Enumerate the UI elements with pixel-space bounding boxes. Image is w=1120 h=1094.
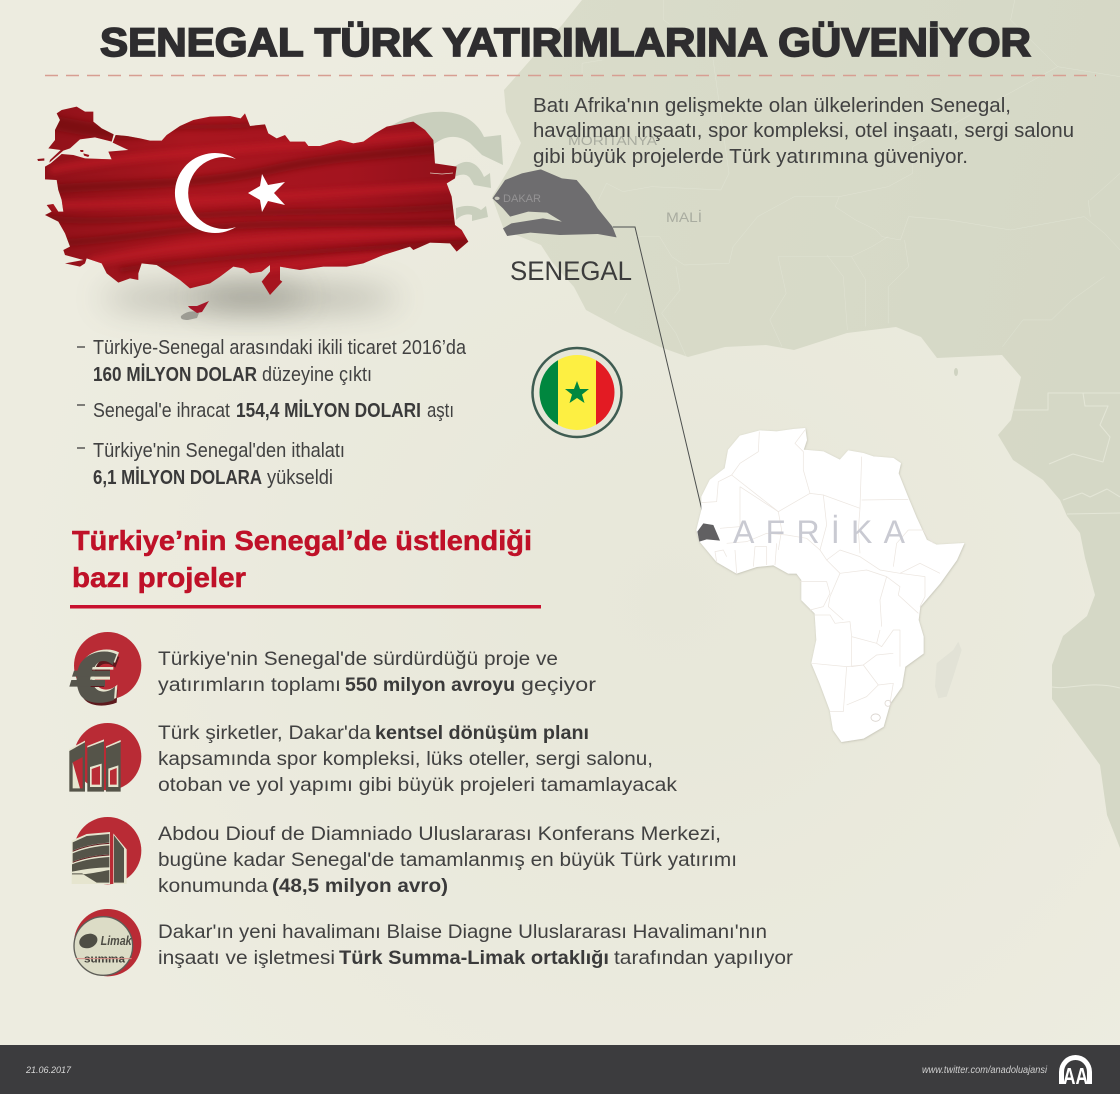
label: Senegal: SENEGAL xyxy=(510,256,632,286)
project text 1: Türkiye'nin Senegal'de sürdürdüğü proje ve xyxy=(158,649,558,670)
bullet 1: Türkiye-Senegal arasındaki ikili ticaret 2016’da xyxy=(93,337,467,359)
icon: Limak Summa logo: Limak xyxy=(101,934,132,948)
project text 2: kentsel dönüşüm planı xyxy=(375,723,589,744)
project text 1: 550 milyon avroyu xyxy=(345,675,515,696)
footer date: 21.06.2017 xyxy=(25,1065,72,1076)
icon: euro xyxy=(69,632,141,706)
bullet 1 xyxy=(77,337,467,386)
label: Mali: MALİ xyxy=(666,208,702,225)
Senegal on Africa map xyxy=(697,523,720,542)
bullet 3: Türkiye'nin Senegal'den ithalatı xyxy=(93,440,345,462)
project text 2 xyxy=(158,723,678,796)
title: SENEGAL TÜRK YATIRIMLARINA GÜVENİYOR xyxy=(100,20,1031,65)
icon: crescent xyxy=(175,153,236,233)
intro text: Batı Afrika'nın gelişmekte olan ülkelerinden Senegal, xyxy=(533,95,1011,117)
projects heading: bazı projeler xyxy=(72,562,246,593)
project text 3: Abdou Diouf de Diamniado Uluslararası Konferans Merkezi, xyxy=(158,824,721,845)
project text 2: Türk şirketler, Dakar'da xyxy=(158,723,371,744)
west africa background map xyxy=(492,0,1120,848)
Madagascar xyxy=(935,642,962,698)
footer bar xyxy=(0,1045,1120,1094)
bullet 2: Senegal'e ihracat xyxy=(93,400,230,422)
project text 3: (48,5 milyon avro) xyxy=(272,876,448,897)
label: Dakar: DAKAR xyxy=(503,193,541,205)
arrows from Turkey to Senegal xyxy=(389,112,503,221)
trade stats bullets xyxy=(77,337,467,489)
footer url: www.twitter.com/anadoluajansi xyxy=(922,1065,1048,1076)
bullet 3 xyxy=(77,440,345,489)
project text 3: konumunda xyxy=(158,876,268,897)
intro text: havalimanı inşaatı, spor kompleksi, otel inşaatı, sergi salonu xyxy=(533,120,1074,142)
Cyprus xyxy=(181,301,209,320)
icon: buildings xyxy=(69,723,141,792)
icon: AA logo: AA xyxy=(1063,1063,1088,1089)
project text 4: tarafından yapılıyor xyxy=(614,948,794,969)
project text 1: geçiyor xyxy=(521,675,597,696)
Senegal on map xyxy=(492,169,617,237)
project text 1: yatırımların toplamı xyxy=(158,675,341,696)
project text 2: kapsamında spor kompleksi, lüks oteller, sergi salonu, xyxy=(158,749,653,770)
bullet 2: 154,4 MİLYON DOLARI xyxy=(236,399,421,422)
Senegal flag xyxy=(532,348,622,437)
projects heading: Türkiye’nin Senegal’de üstlendiği xyxy=(72,525,532,556)
icon: star xyxy=(248,174,285,212)
label: Afrika: AFRİKA xyxy=(733,514,906,550)
project text 4: Dakar'ın yeni havalimanı Blaise Diagne Uluslararası Havalimanı'nın xyxy=(158,922,767,943)
project text 4: Türk Summa-Limak ortaklığı xyxy=(339,948,609,969)
intro text xyxy=(533,95,1074,168)
Turkey map with flag xyxy=(30,100,480,320)
icon: conference building xyxy=(72,817,141,884)
project text 1 xyxy=(158,649,597,696)
bullet 2 xyxy=(77,399,454,422)
project text 4: inşaatı ve işletmesi xyxy=(158,948,335,969)
icon: Limak Summa logo xyxy=(74,909,141,976)
icon: AA logo xyxy=(1059,1055,1092,1089)
bullet 3: 6,1 MİLYON DOLARA xyxy=(93,466,262,489)
projects heading xyxy=(72,525,532,593)
icon: Limak Summa logo: summa xyxy=(84,954,125,966)
project text 4 xyxy=(158,922,794,969)
bullet 2: aştı xyxy=(427,400,454,422)
intro text: gibi büyük projelerde Türk yatırımına güveniyor. xyxy=(533,146,968,168)
Africa map xyxy=(697,428,964,742)
project text 2: otoban ve yol yapımı gibi büyük projeleri tamamlayacak xyxy=(158,775,678,796)
Turkey shadow xyxy=(100,284,400,312)
bullet 1: 160 MİLYON DOLAR xyxy=(93,363,257,386)
project text 3 xyxy=(158,824,737,897)
bullet 3: yükseldi xyxy=(267,467,333,489)
bullet 1: düzeyine çıktı xyxy=(262,364,372,386)
callout line xyxy=(613,227,705,523)
map label: Moritanya: MORİTANYA xyxy=(568,133,657,148)
project text 3: bugüne kadar Senegal'de tamamlanmış en büyük Türk yatırımı xyxy=(158,850,737,871)
